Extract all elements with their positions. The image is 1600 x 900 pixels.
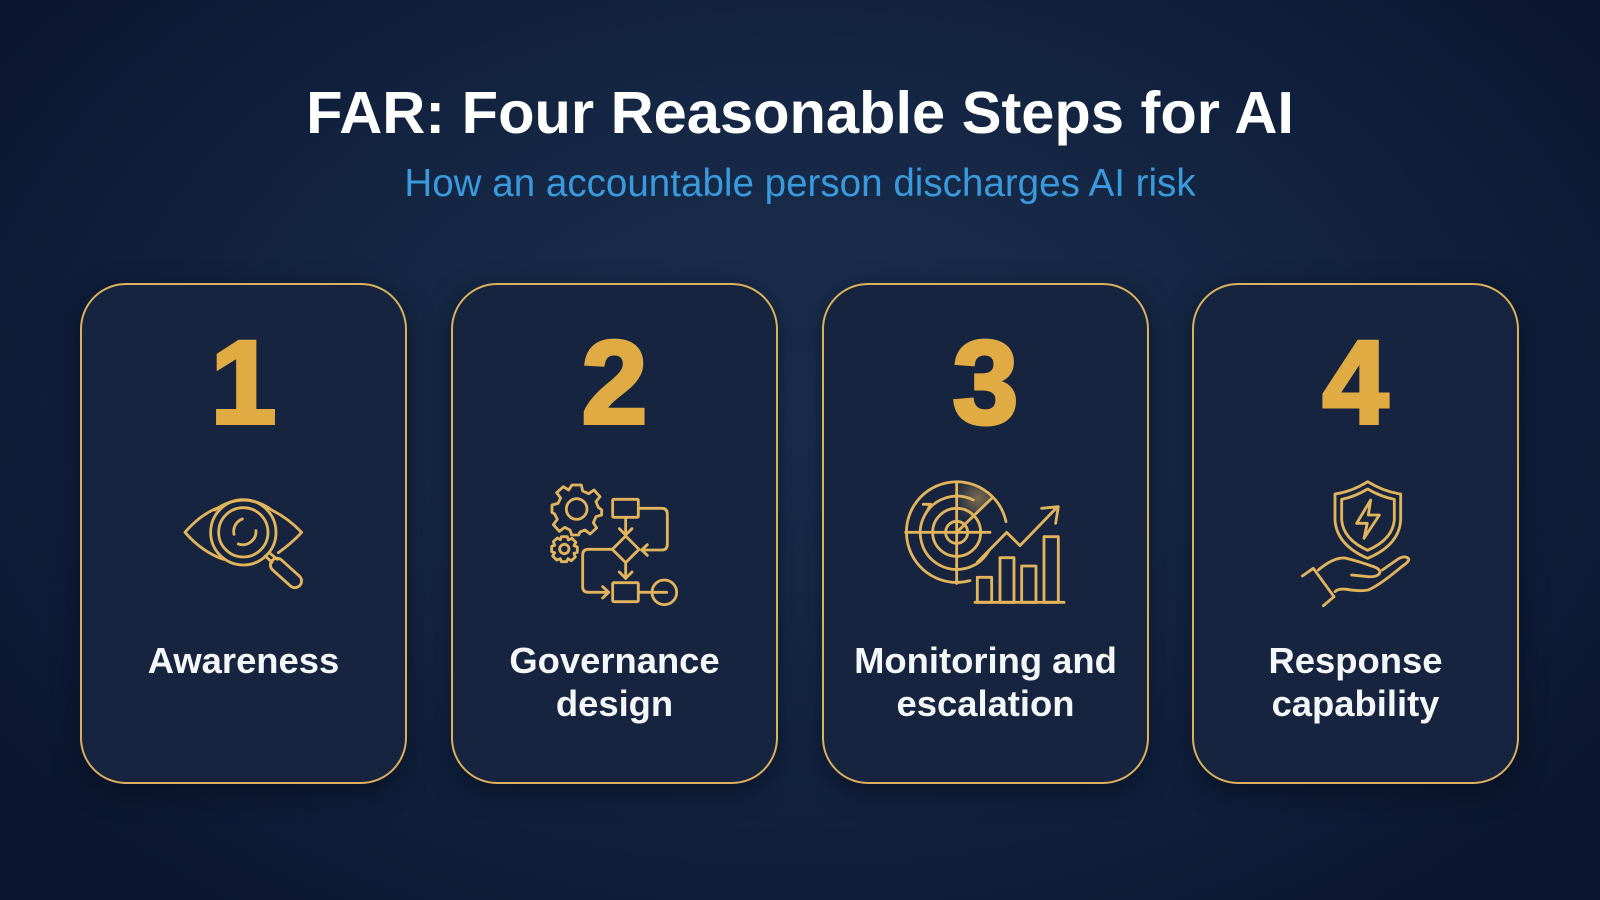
icon: shield on hand [1302, 482, 1409, 606]
icon: radar and growth chart [906, 482, 1064, 602]
icon: eye with magnifier [185, 500, 304, 590]
subtitle: How an accountable person discharges AI risk [404, 162, 1196, 205]
label: response capability [1269, 640, 1442, 724]
icon: gears and flowchart [552, 485, 677, 605]
label: response capability: Response [1269, 640, 1442, 681]
panel: step 1 awareness [80, 283, 407, 784]
label: monitoring and escalation: Monitoring and [854, 640, 1117, 681]
label: awareness: Awareness [148, 640, 339, 681]
label: governance design: design [556, 683, 673, 724]
panel: step 2 governance design [451, 283, 778, 784]
number 1: 1 [211, 317, 276, 449]
panel: step 3 monitoring and escalation [822, 283, 1149, 784]
label: monitoring and escalation [854, 640, 1117, 724]
title: FAR: Four Reasonable Steps for AI [306, 79, 1294, 146]
label: governance design [509, 640, 720, 724]
label: governance design: Governance [509, 640, 720, 681]
number 3: 3 [953, 317, 1018, 449]
label: monitoring and escalation: escalation [896, 683, 1074, 724]
panel: step 4 response capability [1192, 283, 1519, 784]
number 4: 4 [1323, 317, 1388, 449]
label: response capability: capability [1272, 683, 1439, 724]
number 2: 2 [582, 317, 647, 449]
